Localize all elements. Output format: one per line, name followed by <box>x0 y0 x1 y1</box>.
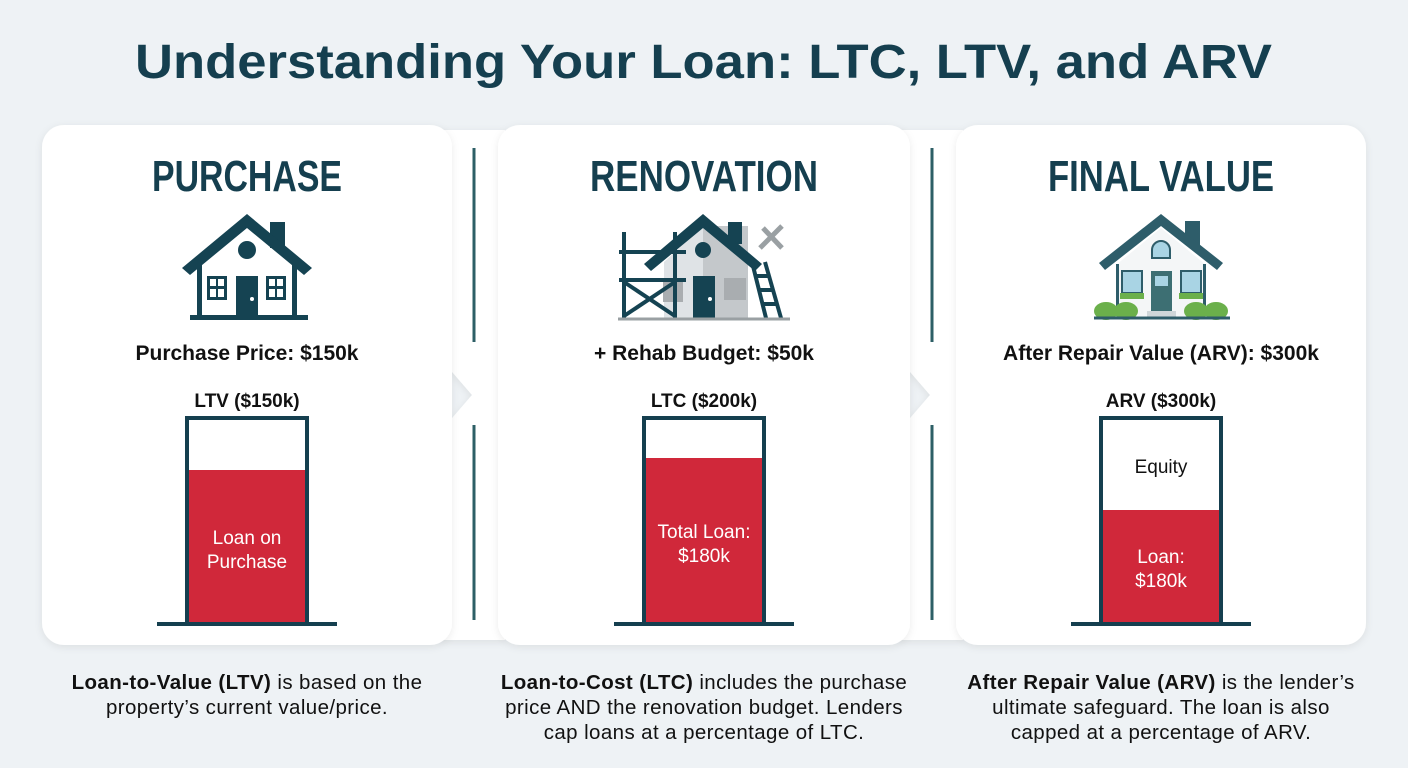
heading: renovation: RENOVATION <box>590 152 818 201</box>
label: LTV: LTV ($150k) <box>194 391 300 412</box>
caption: LTC: Loan-to-Cost (LTC) includes the purchase <box>501 671 907 694</box>
bar: ARV: Equity <box>1135 457 1188 478</box>
label: LTC: LTC ($200k) <box>651 391 757 412</box>
caption: LTV: property’s current value/price. <box>106 696 388 719</box>
panel: final value <box>956 125 1366 645</box>
label: purchase price: Purchase Price: $150k <box>136 342 359 365</box>
caption: LTC: price AND the renovation budget. Lenders <box>505 696 903 719</box>
caption: LTC <box>501 671 907 744</box>
bar: ARV: $180k <box>1135 571 1187 592</box>
connector: chevron 1 <box>440 130 522 640</box>
caption: ARV: capped at a percentage of ARV. <box>1011 721 1311 744</box>
icon: house <box>182 214 312 320</box>
heading: purchase: PURCHASE <box>152 152 342 201</box>
panel: purchase <box>42 125 452 645</box>
label: ARV bar: ARV ($300k) <box>1106 391 1216 412</box>
label: ARV: After Repair Value (ARV): $300k <box>1003 342 1319 365</box>
icon: house under renovation <box>618 214 790 319</box>
caption: LTV: Loan-to-Value (LTV) is based on the <box>72 671 422 694</box>
title: Understanding Your Loan: LTC, LTV, and ARV <box>135 36 1272 89</box>
icon: finished house <box>1094 214 1230 320</box>
panel: renovation <box>498 125 910 645</box>
bar: LTV <box>157 418 337 624</box>
bar: LTC: $180k <box>678 546 730 567</box>
bar: LTC: Total Loan: <box>658 522 750 543</box>
caption: ARV <box>967 671 1355 744</box>
caption: LTC: cap loans at a percentage of LTC. <box>544 721 864 744</box>
label: rehab budget: + Rehab Budget: $50k <box>594 342 814 365</box>
bar: LTC <box>614 418 794 624</box>
caption: ARV: After Repair Value (ARV) is the lender’s <box>967 671 1355 694</box>
bar: LTV: Purchase <box>207 552 287 573</box>
caption: ARV: ultimate safeguard. The loan is also <box>992 696 1330 719</box>
bar: ARV: Loan: <box>1137 547 1185 568</box>
connector: chevron 2 <box>898 130 980 640</box>
heading: final value: FINAL VALUE <box>1048 152 1274 201</box>
bar: ARV <box>1071 418 1251 624</box>
caption: LTV <box>72 671 422 719</box>
bar: LTV: Loan on <box>213 528 281 549</box>
